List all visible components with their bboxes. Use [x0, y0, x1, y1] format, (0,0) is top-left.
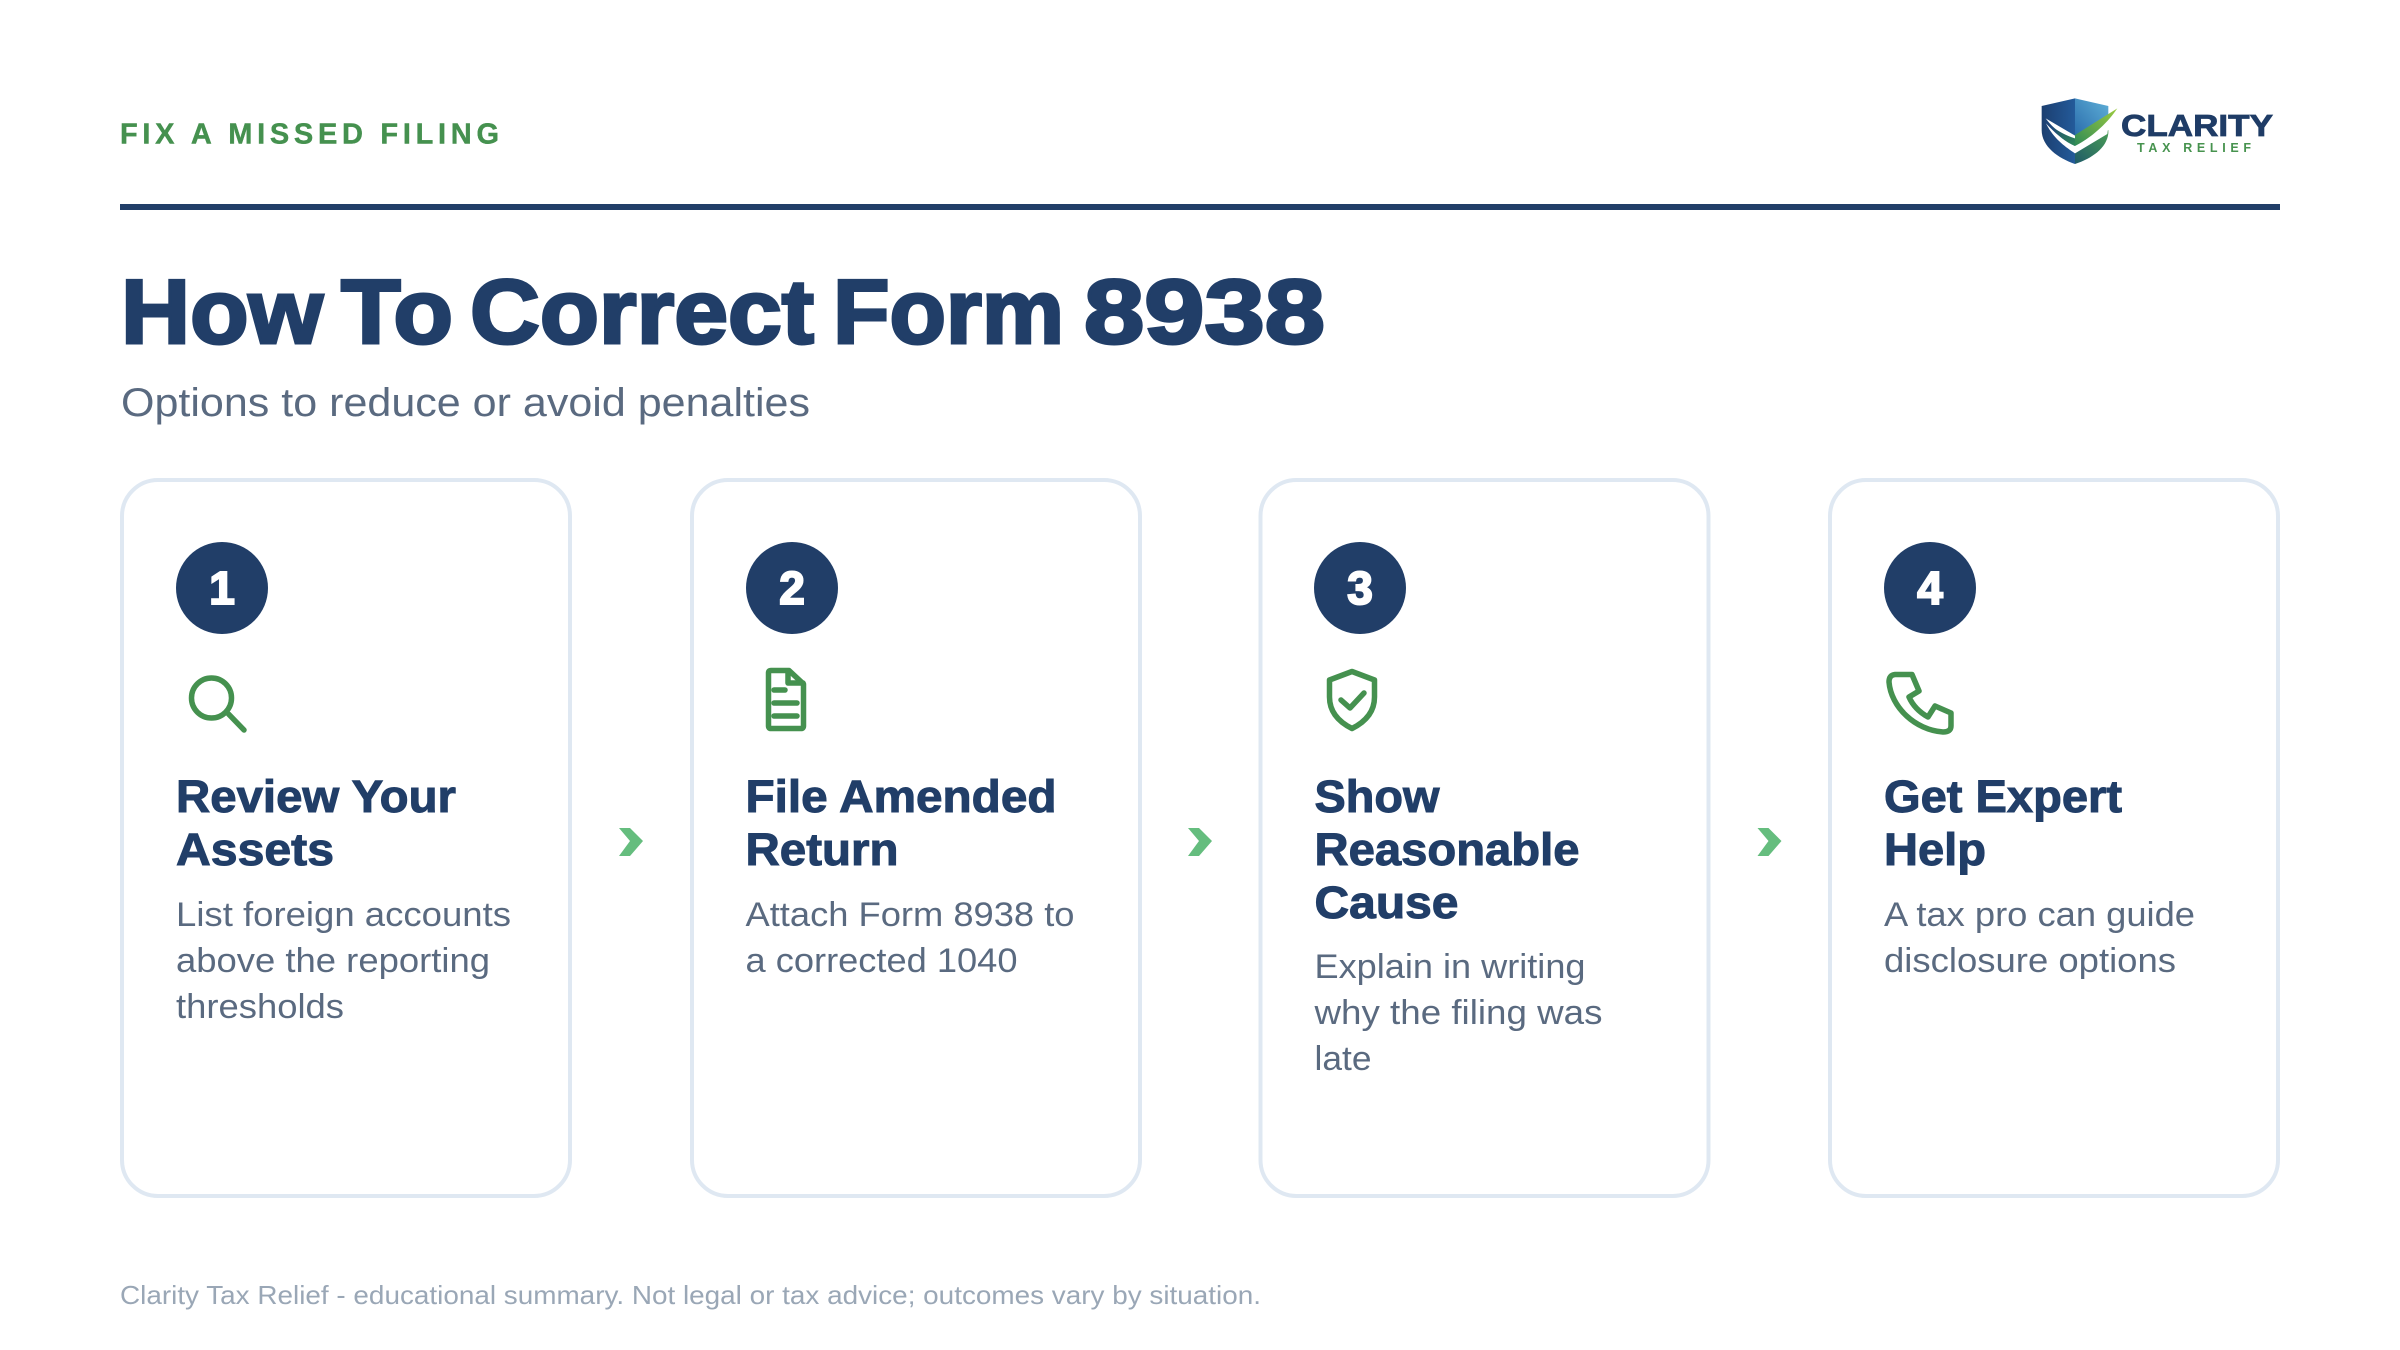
- step number 1: 1: [209, 562, 235, 614]
- title: Form: [833, 262, 1064, 363]
- panel: step 1 review your assets: [122, 480, 570, 1196]
- title: Correct: [470, 262, 814, 363]
- title: To: [341, 262, 453, 363]
- description: a corrected 1040: [746, 942, 1018, 980]
- logo shield mark: [2042, 98, 2117, 164]
- title: [121, 262, 1325, 363]
- icon: magnifying glass: [192, 678, 244, 730]
- heading: show reasonable cause: Reasonable: [1314, 824, 1580, 875]
- eyebrow label: FIX A MISSED FILING: [120, 118, 499, 150]
- description: disclosure options: [1884, 942, 2176, 980]
- description: late: [1314, 1040, 1372, 1078]
- heading: file amended return: [746, 771, 1056, 875]
- heading: get expert help: Help: [1884, 824, 1986, 875]
- panel: step 2 file amended return: [692, 480, 1140, 1196]
- logo: Clarity Tax Relief: [2042, 98, 2273, 164]
- logo wordmark: CLARITY: [2121, 108, 2273, 143]
- icon: document: [768, 670, 804, 728]
- panel: step 3 show reasonable cause: [1260, 480, 1708, 1196]
- step number 1: [176, 542, 268, 634]
- description: Attach Form 8938 to: [746, 896, 1074, 934]
- description: thresholds: [176, 988, 344, 1026]
- description: [746, 896, 1074, 980]
- heading: file amended return: File Amended: [746, 771, 1056, 822]
- heading: show reasonable cause: [1314, 771, 1580, 928]
- heading: show reasonable cause: Cause: [1314, 877, 1458, 928]
- description: List foreign accounts: [176, 896, 511, 934]
- description: [176, 896, 511, 1026]
- step number 3: 3: [1347, 562, 1373, 614]
- footer disclaimer: Clarity Tax Relief - educational summary. Not legal or tax advice; outcomes vary by situation.: [120, 1280, 1261, 1310]
- description: why the filing was: [1313, 994, 1602, 1032]
- heading: file amended return: Return: [746, 824, 898, 875]
- title: How: [121, 262, 323, 363]
- step number 3: [1314, 542, 1406, 634]
- heading: review your assets: [176, 771, 456, 875]
- description: above the reporting: [176, 942, 490, 980]
- description: Explain in writing: [1314, 948, 1586, 986]
- subtitle: Options to reduce or avoid penalties: [121, 381, 810, 425]
- heading: get expert help: Get Expert: [1884, 771, 2122, 822]
- header rule: [120, 204, 2280, 210]
- arrow 1 to 2: [619, 828, 643, 856]
- description: [1313, 948, 1602, 1078]
- logo tagline: TAX RELIEF: [2137, 141, 2251, 155]
- heading: review your assets: Review Your: [176, 771, 456, 822]
- arrow 2 to 3: [1188, 828, 1212, 856]
- description: [1884, 896, 2195, 980]
- heading: show reasonable cause: Show: [1314, 771, 1441, 822]
- panel: step 4 get expert help: [1830, 480, 2278, 1196]
- icon: phone: [1889, 674, 1951, 732]
- step number 4: 4: [1917, 562, 1943, 614]
- description: A tax pro can guide: [1884, 896, 2195, 934]
- heading: review your assets: Assets: [176, 824, 334, 875]
- step number 2: [746, 542, 838, 634]
- title: 8938: [1084, 262, 1325, 363]
- arrow 3 to 4: [1758, 828, 1782, 856]
- step number 4: [1884, 542, 1976, 634]
- step number 2: 2: [779, 562, 805, 614]
- icon: shield with check: [1330, 672, 1374, 728]
- heading: get expert help: [1884, 771, 2122, 875]
